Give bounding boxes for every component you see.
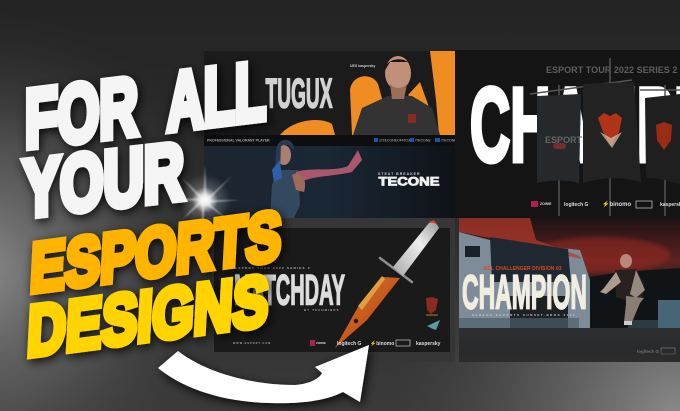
division caption: ECL CHALLENGER DIVISION 03: [484, 266, 562, 272]
panel: Matchday banner: WWW.ESPORT.COM: [233, 342, 271, 345]
bar: Tugux social strip: /TECONE: [415, 138, 431, 142]
panel: Tugux banner: TUGUX: [266, 70, 332, 116]
orange brush strokes: [280, 51, 455, 135]
panel: Tecone banner: [204, 140, 455, 218]
sponsor row: logitech G: [637, 349, 660, 354]
red smoke sky: [530, 237, 670, 273]
sponsor row: [531, 200, 680, 208]
panel: Champion banners: [455, 50, 680, 218]
sponsor logos: UES kaspersky: [350, 64, 375, 68]
headline: esports designs: [25, 196, 283, 372]
sponsor row: logitech G: [564, 202, 589, 208]
curved white arrow: [158, 345, 369, 403]
word: ALL: ALL: [167, 46, 266, 148]
tour caption: ESPORT TOUR 2022 SERIES 2: [546, 65, 680, 75]
sponsor row: ⚡binomo: [370, 340, 394, 347]
word: ESPORTS: ESPORTS: [28, 196, 283, 307]
panel: Matchday banner: [204, 218, 455, 362]
ground fade: [459, 328, 680, 340]
player name: TECONE: [378, 174, 440, 188]
bar: Tugux social strip: @TECONEOFFICIAL: [379, 138, 414, 142]
sponsor row: ZOWIE: [540, 202, 552, 206]
sponsor row: logitech G: [337, 341, 362, 347]
headline: for all your: [23, 46, 266, 235]
hanging banner: red mascot right: [645, 94, 680, 184]
sponsor row: kaspersky: [416, 341, 441, 347]
bar: Tugux social strip: [204, 135, 457, 146]
word: YOUR: YOUR: [23, 127, 184, 235]
building: [459, 218, 590, 332]
rooftop and water: [590, 268, 680, 328]
word: DESIGNS: DESIGNS: [25, 261, 271, 372]
sponsor row: [637, 348, 675, 354]
event caption: SERENA ESPORTS SUNSET-BROS 2022: [472, 313, 576, 317]
word: FOR: FOR: [25, 61, 138, 166]
sponsor row: [310, 340, 441, 347]
team logos: [426, 297, 440, 330]
icon: combat knife: [335, 220, 439, 348]
hanging banner: red mascot: [583, 82, 641, 183]
banner poles: [530, 58, 680, 216]
panel: Matchday banner: BY TECHMINDS: [304, 308, 340, 312]
bar: Tugux social strip: PROFESSIONAL VALORANT PLAYER: [207, 138, 270, 142]
sponsor row: ZOWIE: [316, 341, 326, 345]
matchday captions: ESPORT TOUR 2022 SERIES 2: [235, 266, 311, 270]
panel: Matchday banner: MATCHDAY: [234, 266, 345, 314]
hanging banner: esport: ESPORT: [545, 135, 583, 145]
character art: [270, 140, 362, 218]
panel: Champion photo banner: [459, 218, 680, 362]
hanging banner: esport: [537, 94, 583, 183]
panel edge fade: [459, 335, 680, 362]
seated figure: [600, 254, 645, 325]
bar: Tugux social strip: /TECONE: [441, 138, 457, 142]
player photo: [353, 56, 440, 135]
lens flare: [172, 165, 240, 232]
sponsor row: ⚡binomo: [602, 200, 631, 208]
panel: Tugux banner: [204, 51, 455, 135]
role caption: STEAT BREAKER: [378, 172, 420, 176]
